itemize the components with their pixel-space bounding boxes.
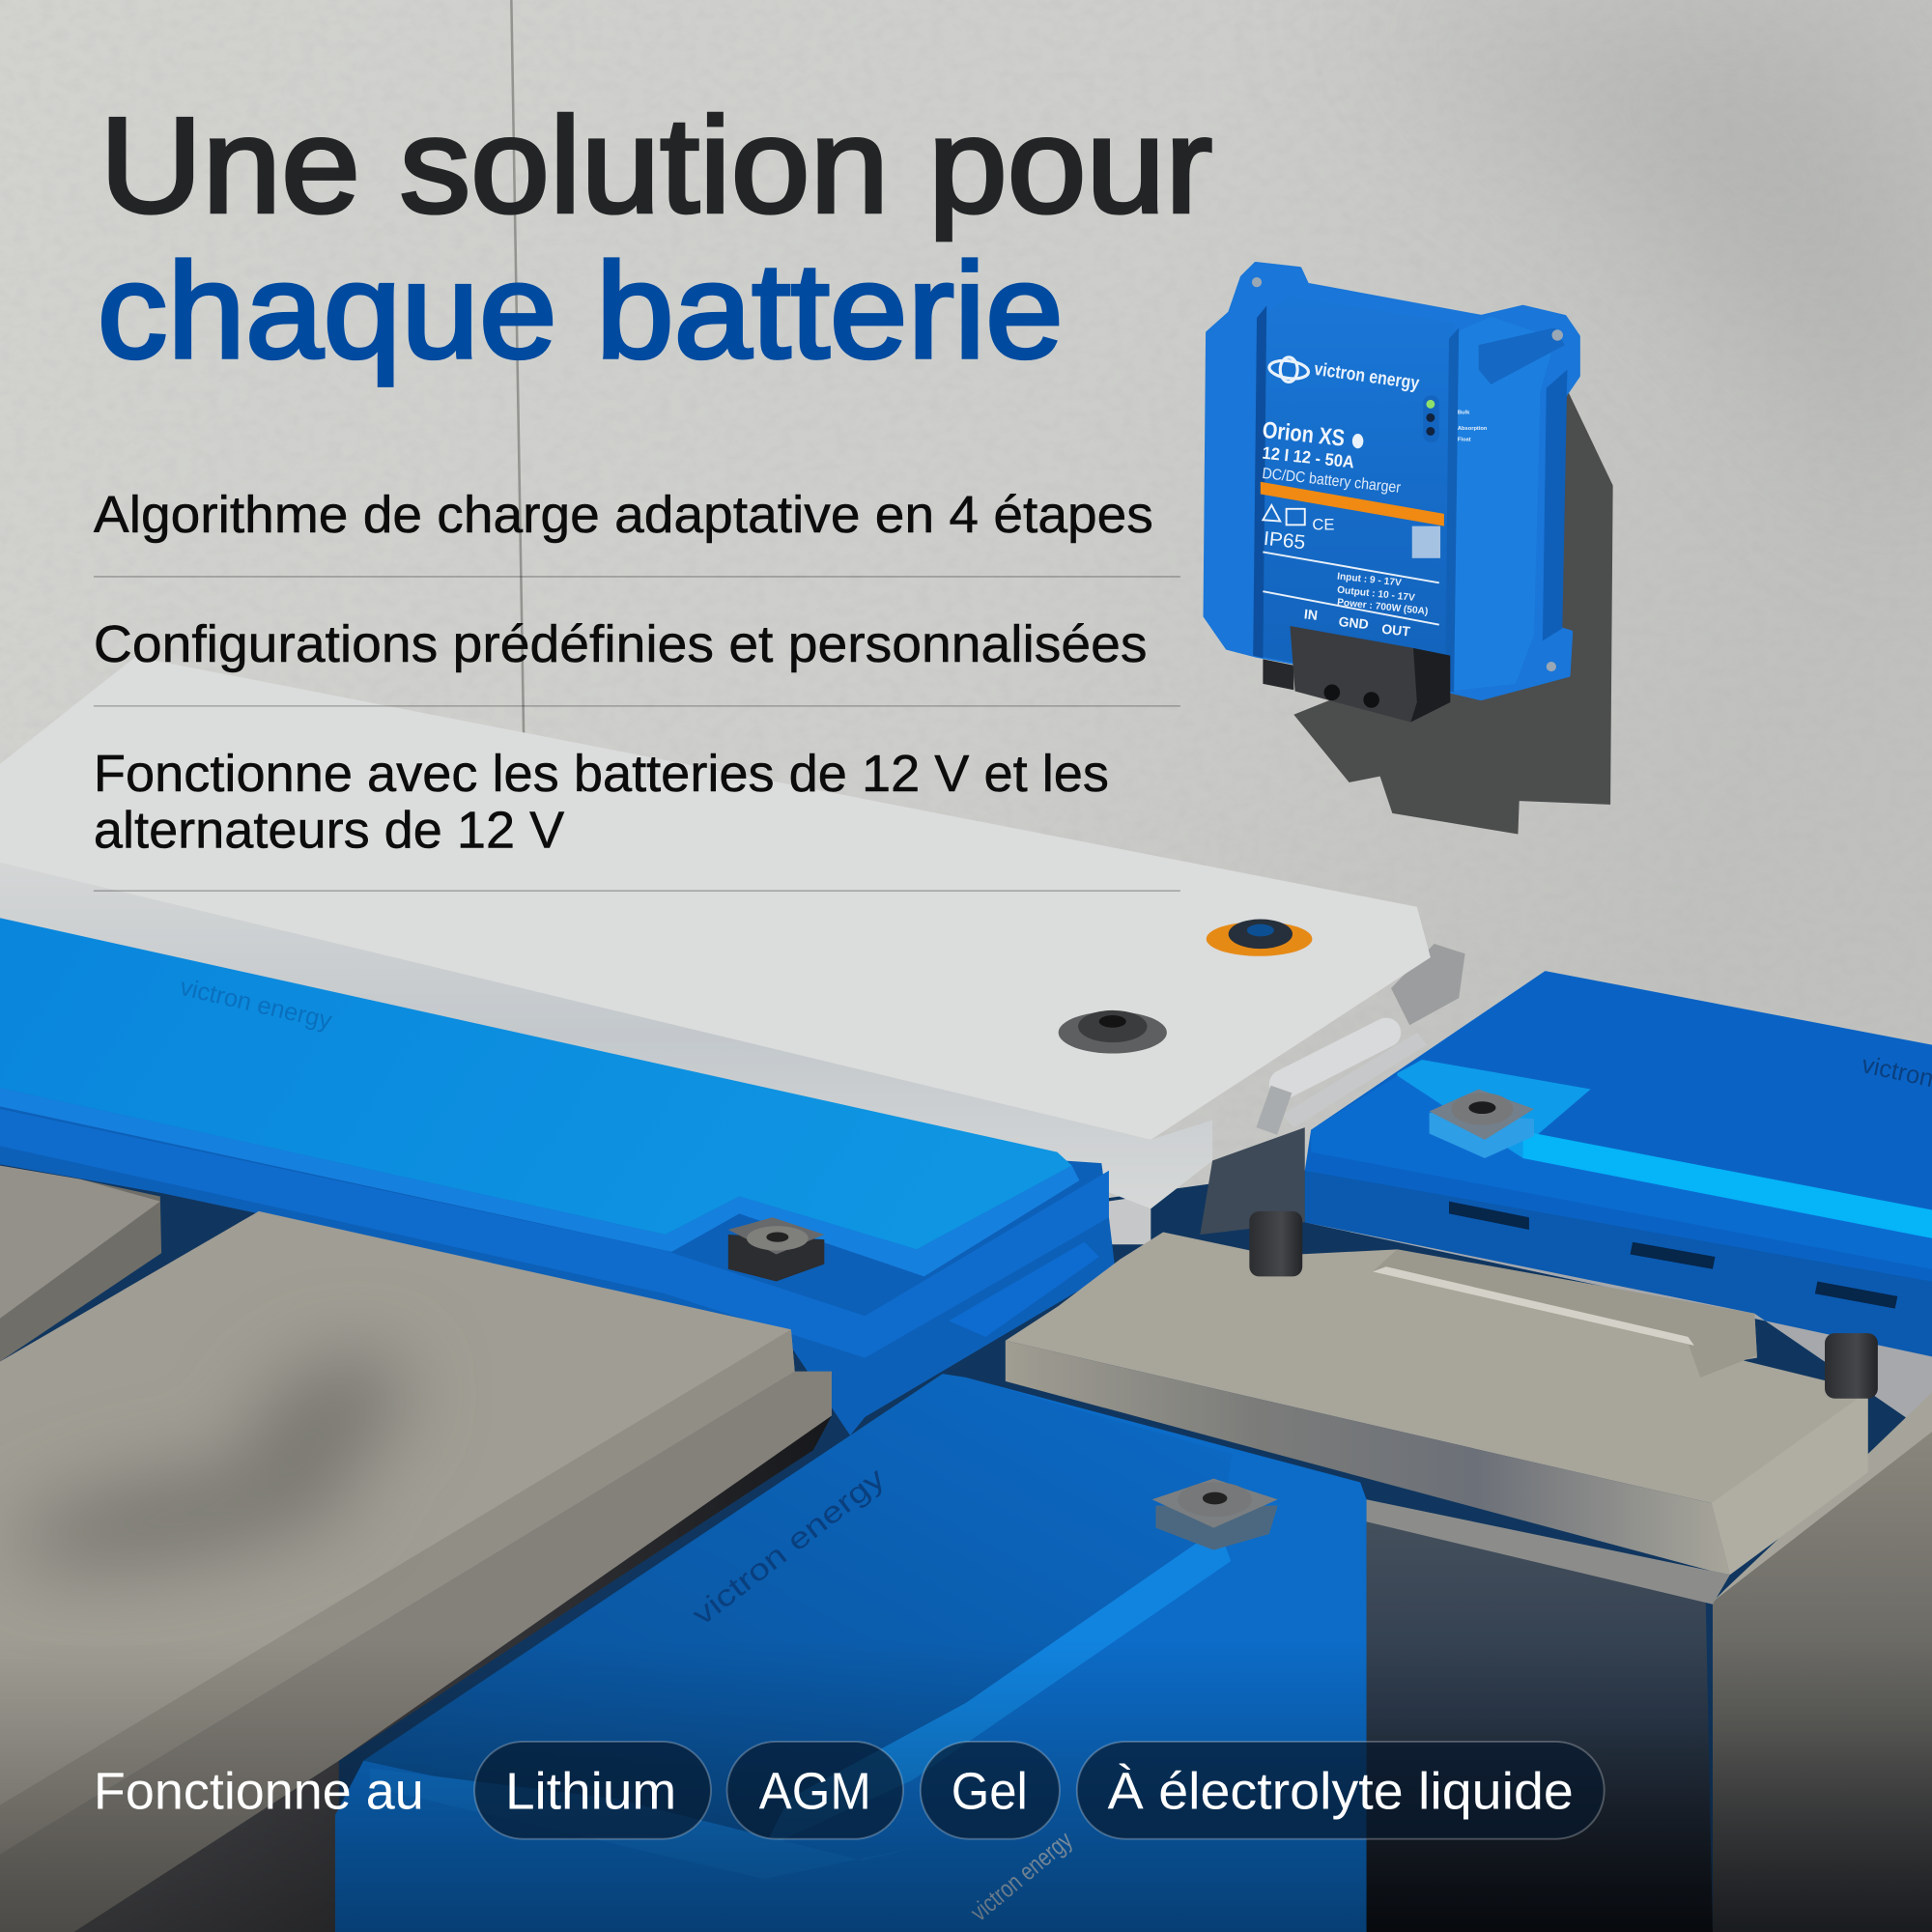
pill: Gel: Gel [952, 1763, 1028, 1820]
negative terminal [1059, 1010, 1167, 1054]
connector cover [1290, 626, 1450, 722]
battery: white [0, 657, 1465, 1244]
row label: Fonctionne au [94, 1763, 424, 1820]
pill: AGM [727, 1742, 903, 1839]
battery: small grey top left [0, 1166, 161, 1361]
feature 3 continued: alternateurs de 12 V [94, 803, 564, 860]
positive terminal [1207, 920, 1312, 956]
device screws [1252, 277, 1563, 671]
status LEDs [1423, 395, 1439, 442]
safety icons [1263, 505, 1334, 533]
device logo mark [1268, 357, 1310, 382]
posts [1249, 1211, 1878, 1399]
battery types row [94, 1742, 1605, 1839]
LED labels: Absorption [1458, 426, 1488, 432]
lower brand text: victron energy [966, 1827, 1078, 1926]
feature 2: Configurations prédéfinies et personnalisées [94, 616, 1147, 673]
IP rating: IP65 [1263, 528, 1306, 554]
title [98, 89, 1212, 386]
brand text: victron energy [178, 974, 334, 1035]
dark base under batteries [0, 1109, 1932, 1932]
LED labels: Bulk [1458, 411, 1470, 416]
cable [1266, 1033, 1386, 1131]
device shadow on wall [1293, 380, 1613, 835]
product description: DC/DC battery charger [1262, 466, 1402, 497]
battery: right blue [1305, 971, 1932, 1356]
device body [1205, 264, 1578, 698]
battery: bottom centre blue [335, 1374, 1367, 1932]
spec lines [1263, 552, 1439, 625]
spec text: Output : 10 - 17V [1337, 585, 1415, 604]
feature 1: Algorithme de charge adaptative en 4 étapes [94, 487, 1153, 544]
pill: À électrolyte liquide [1077, 1742, 1605, 1839]
pill: Gel [921, 1742, 1060, 1839]
product rating: 12 I 12 - 50A [1262, 443, 1355, 471]
feature list [94, 487, 1153, 860]
background: concrete wall [0, 0, 1932, 1233]
QR code [1412, 526, 1440, 558]
title line 2: chaque batterie [98, 235, 1064, 386]
terminal [1152, 1479, 1278, 1550]
pill: Lithium [474, 1742, 711, 1839]
terminal labels [1303, 606, 1411, 639]
battery: large grey left [0, 1211, 832, 1932]
device logo text: victron energy [1313, 359, 1421, 394]
terminal labels: IN [1303, 606, 1319, 623]
spec text [1337, 572, 1429, 617]
terminal [1430, 1090, 1534, 1158]
battery: right grey [1006, 1211, 1932, 1932]
feature 3: Fonctionne avec les batteries de 12 V et les [94, 746, 1109, 803]
terminal labels: OUT [1381, 621, 1411, 639]
bluetooth icon [1352, 434, 1363, 448]
bottom dark fade [0, 1638, 1932, 1932]
terminal labels: GND [1338, 613, 1370, 632]
product name: Orion XS [1261, 417, 1346, 452]
orange band [1261, 482, 1444, 526]
title line 1: Une solution pour [99, 89, 1212, 241]
battery: centre left blue [0, 918, 1115, 1435]
brand text: victron energy [686, 1462, 892, 1632]
spec text: Power : 700W (50A) [1337, 597, 1429, 617]
LED labels [1458, 411, 1488, 443]
device: Orion XS charger [1205, 264, 1578, 722]
safety icons: CE [1312, 515, 1334, 533]
pill: À électrolyte liquide: À électrolyte liquide [1108, 1763, 1574, 1820]
pill: AGM: AGM [759, 1763, 871, 1820]
spec text: Input : 9 - 17V [1337, 572, 1402, 588]
pill: Lithium: Lithium [505, 1763, 676, 1820]
terminal [728, 1217, 824, 1282]
LED labels: Float [1458, 438, 1471, 443]
screw terminal [1263, 659, 1293, 690]
